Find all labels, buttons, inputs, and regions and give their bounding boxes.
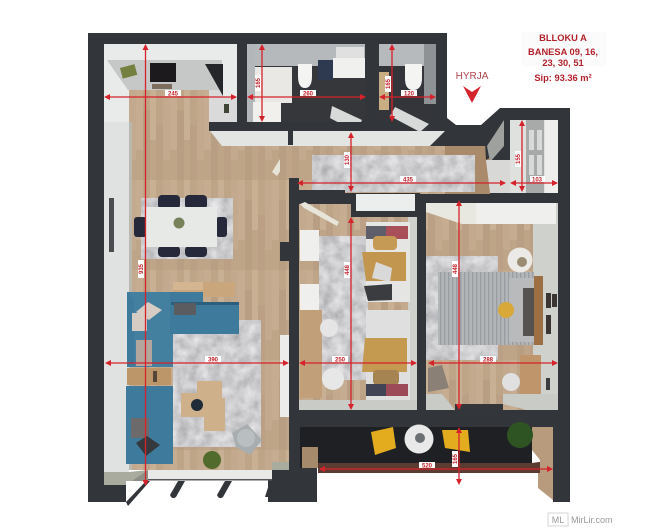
white cabinet bbox=[280, 335, 289, 417]
panel: lounge bbox=[126, 282, 289, 469]
dimension: 250 bbox=[299, 356, 417, 366]
outer walls bbox=[88, 33, 570, 502]
dimension: 288 bbox=[428, 356, 558, 366]
table bbox=[146, 207, 217, 247]
cushions bbox=[136, 302, 162, 320]
sofa: upper bbox=[127, 292, 239, 367]
dimension: 935: 935 bbox=[139, 263, 145, 274]
title block: BANESA 09, 16, bbox=[528, 47, 598, 57]
dimension: 245: 245 bbox=[168, 92, 179, 98]
dimension: 520: 520 bbox=[422, 464, 433, 470]
dimension: 250: 250 bbox=[335, 358, 346, 364]
rug bbox=[319, 236, 368, 380]
dimension: 165 small bath bbox=[385, 44, 395, 122]
coffee table bbox=[181, 381, 225, 431]
dimension: 448 left: 448 bbox=[345, 264, 351, 275]
side table bbox=[508, 248, 532, 272]
entrance label bbox=[456, 71, 489, 103]
rug: lounge bbox=[173, 320, 261, 447]
toilet bbox=[298, 64, 312, 88]
watermark: MirLir.com bbox=[571, 515, 613, 525]
panel: dining set bbox=[134, 195, 233, 259]
rug bbox=[426, 256, 498, 360]
dimension: 245 bbox=[104, 90, 237, 100]
dimension: 120: 120 bbox=[404, 92, 415, 98]
wardrobe bbox=[300, 230, 319, 261]
dimension: 103 bbox=[510, 176, 558, 186]
dimension: 390: 390 bbox=[208, 358, 219, 364]
dimension: 165 balcony bbox=[452, 427, 462, 485]
panel: bedroom 1 bbox=[299, 194, 417, 410]
rug: hallway bbox=[312, 155, 475, 192]
side tray bbox=[127, 368, 171, 385]
title block: 23, 30, 51 bbox=[542, 58, 584, 68]
dimension lines bbox=[104, 44, 558, 486]
title block bbox=[522, 32, 606, 83]
dimension: 520 bbox=[319, 462, 553, 472]
chair: left bbox=[371, 427, 396, 455]
desk bbox=[520, 355, 541, 398]
bed: lower bbox=[362, 310, 410, 400]
dimension: 120 bbox=[379, 90, 436, 100]
panel: hallway bbox=[280, 110, 510, 194]
dimension: 448 right bbox=[452, 200, 462, 410]
dimension: 390 bbox=[105, 356, 289, 366]
dimension: 130: 130 bbox=[345, 154, 351, 165]
desk bbox=[300, 310, 322, 398]
dimension: 260 bbox=[247, 90, 366, 100]
dimension: 165 balcony: 165 bbox=[453, 453, 459, 464]
plant bbox=[203, 451, 221, 469]
bed bbox=[438, 272, 534, 345]
interior bathroom doors and soffit bbox=[210, 106, 445, 176]
headboard bbox=[534, 276, 543, 345]
dimension: 288: 288 bbox=[483, 358, 494, 364]
dimension: 155 bbox=[515, 120, 525, 192]
panel: small bathroom bbox=[379, 44, 436, 120]
icon: cooktop bbox=[150, 63, 176, 82]
bathtub bbox=[255, 67, 292, 103]
rug: dining bbox=[141, 198, 233, 259]
dimension: 435 bbox=[297, 176, 506, 186]
armchair bbox=[232, 424, 262, 455]
dimension: 448 right: 448 bbox=[453, 263, 459, 274]
dimension: 103: 103 bbox=[532, 178, 543, 184]
plant bbox=[507, 422, 533, 448]
dimension: 165: 165 bbox=[256, 77, 262, 88]
icon: table plant bbox=[174, 218, 184, 228]
dimension: 165 small bath: 165 bbox=[386, 78, 392, 89]
panel: main bathroom bbox=[247, 44, 366, 122]
pillows bbox=[523, 288, 540, 336]
dimension: 935 bbox=[138, 44, 148, 486]
pictures bbox=[546, 293, 551, 308]
watermark bbox=[548, 513, 613, 526]
panel: utility room bbox=[510, 120, 558, 193]
dimension: 165 bbox=[255, 44, 265, 122]
title block: Sip: 93.36 m² bbox=[534, 73, 592, 83]
bed: upper bbox=[362, 222, 410, 302]
dimension: 155: 155 bbox=[516, 153, 522, 164]
title block: BLLOKU A bbox=[539, 33, 587, 43]
chair: right bbox=[442, 430, 470, 452]
watermark: ML bbox=[552, 515, 564, 525]
panel: bedroom 2 bbox=[426, 203, 558, 410]
icon: entrance arrow bbox=[463, 86, 481, 103]
dimension: 130 bbox=[344, 132, 354, 192]
dimension: 448 left bbox=[344, 217, 354, 410]
sofa: lower bbox=[126, 386, 173, 464]
console bbox=[173, 282, 235, 297]
panel: living room floor bbox=[104, 90, 289, 509]
dimension: 435: 435 bbox=[403, 178, 414, 184]
inner walls bbox=[209, 33, 570, 430]
vanity bbox=[333, 58, 366, 78]
dimension: 260: 260 bbox=[303, 92, 314, 98]
side table bbox=[404, 424, 434, 454]
panel: kitchen bbox=[104, 44, 237, 122]
wall radiator bbox=[109, 198, 114, 252]
entrance label: HYRJA bbox=[456, 71, 489, 82]
icon: herb tray bbox=[120, 64, 137, 79]
panel: balcony bbox=[300, 422, 553, 500]
striped mat bbox=[428, 365, 449, 392]
